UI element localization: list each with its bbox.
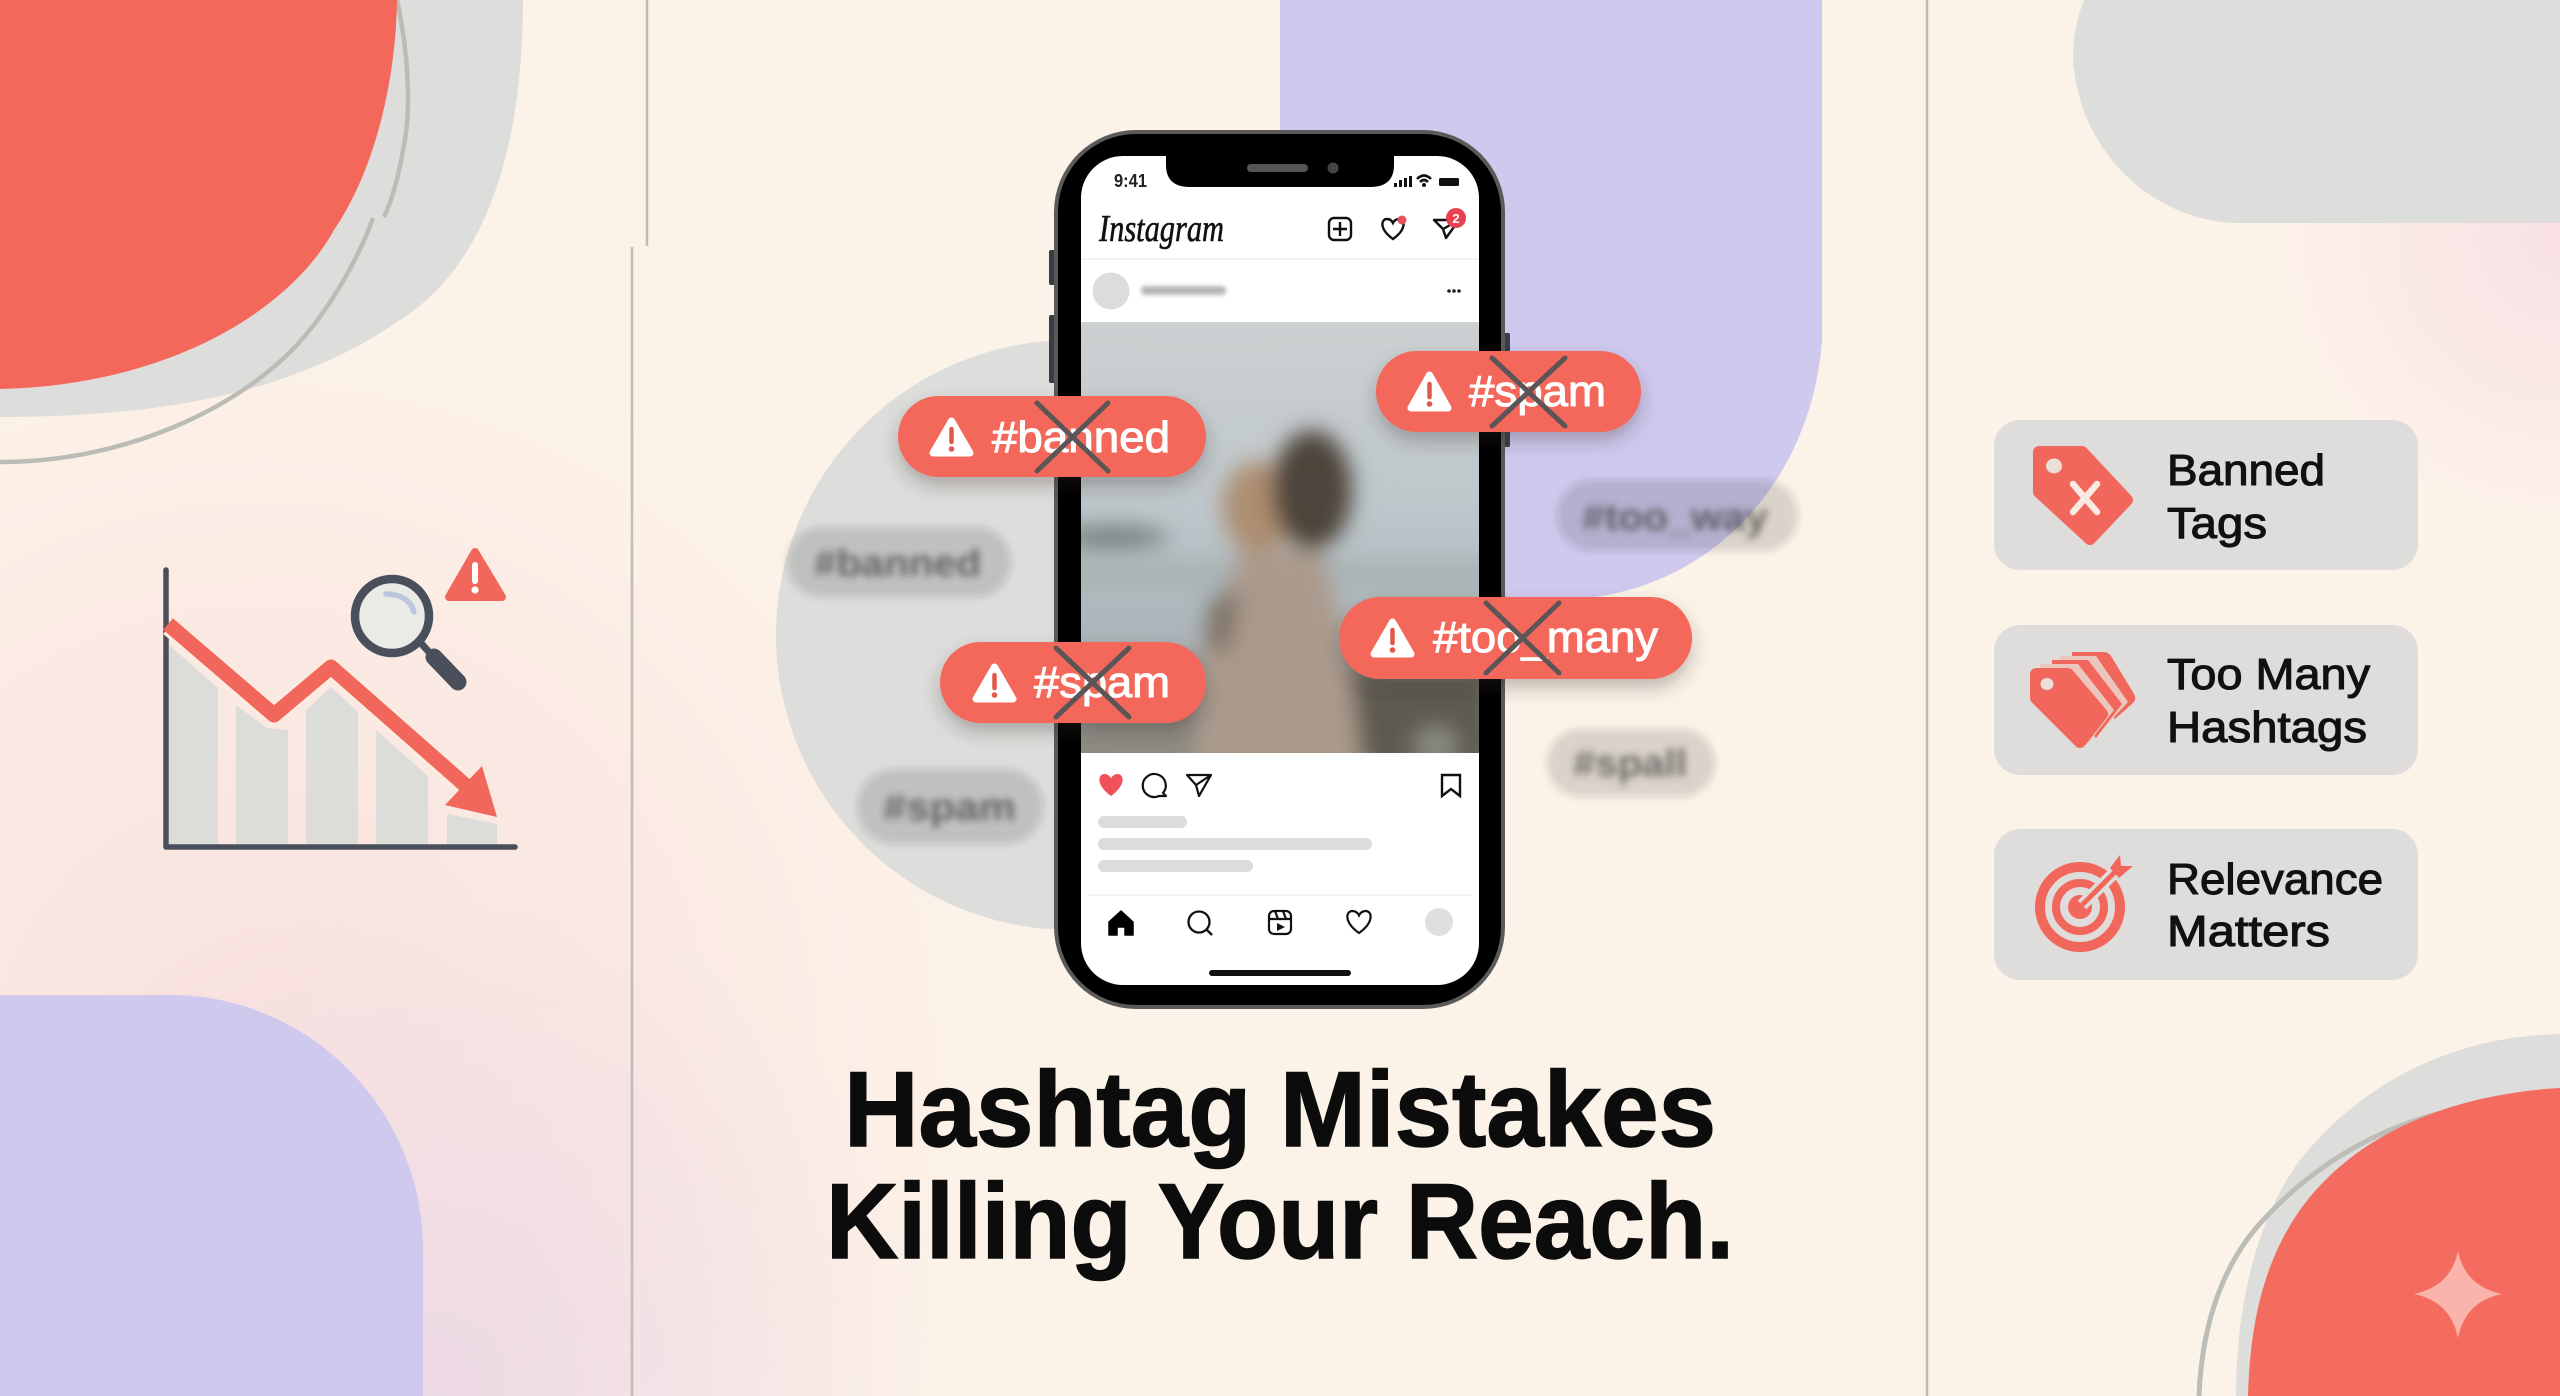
warning tag: #banned: #banned <box>992 413 1170 462</box>
icon: target and arrow <box>2040 855 2133 947</box>
icon: messages with badge: 2 <box>1452 211 1460 226</box>
icon: messages with badge <box>1434 208 1466 238</box>
blob: top-right grey <box>2073 0 2560 223</box>
blurred tag: #spall: #spall <box>1573 743 1687 785</box>
warning tag: #spam right: #spam <box>1469 367 1606 416</box>
blurred tag: #spam: #spam <box>883 787 1016 829</box>
card label: Too Many <box>2167 650 2370 699</box>
icon: add post <box>1329 218 1351 240</box>
home indicator <box>1209 970 1351 976</box>
chart axes <box>166 570 515 847</box>
phone mockup <box>1040 130 1520 1009</box>
blurred tag: #too_way <box>1557 480 1798 551</box>
phone screen <box>1081 156 1479 985</box>
warning tag: #banned <box>898 396 1206 477</box>
card: Relevance Matters: Matters <box>2167 907 2330 956</box>
blurred tag: #banned: #banned <box>814 543 981 585</box>
card: Too Many Hashtags <box>1994 625 2418 775</box>
status bar icons <box>1394 176 1459 187</box>
Instagram wordmark: Instagram <box>1098 208 1224 250</box>
blurred tag: #spall <box>1547 729 1715 797</box>
icon: banned tag <box>2039 452 2127 539</box>
title <box>826 1049 1734 1281</box>
title: Killing Your Reach. <box>826 1161 1734 1281</box>
blob: top-left grey, curve and coral <box>0 0 523 462</box>
warning tag: #too_many <box>1339 597 1692 679</box>
card: Too Many Hashtags: Hashtags <box>2167 703 2367 752</box>
bottom navigation <box>1109 908 1453 936</box>
warning tag: #spam right <box>1376 351 1641 432</box>
card: Relevance Matters <box>1994 829 2418 980</box>
phone side buttons <box>1049 250 1510 447</box>
notch <box>1166 150 1394 187</box>
status bar time: 9:41 <box>1114 171 1147 191</box>
warning tag: #spam left: #spam <box>1034 658 1170 707</box>
card: Banned Tags <box>1994 420 2418 570</box>
phone body <box>1054 130 1505 1009</box>
post actions <box>1099 774 1460 797</box>
backdrop: lavender panel behind phone <box>1280 0 1822 600</box>
post header <box>1092 272 1461 310</box>
declining trend arrow <box>168 624 497 817</box>
card: Banned Tags: Tags <box>2167 499 2267 548</box>
warning tag: #spam left <box>940 642 1206 723</box>
icon: warning triangle <box>449 552 502 597</box>
blob: bottom-right grey, curve, coral and sparkle <box>2199 1034 2560 1396</box>
warning tag: #too_many: #too_many <box>1433 613 1658 662</box>
blurred tag: #too_way: #too_way <box>1582 497 1768 539</box>
icon: stacked tags <box>2036 652 2135 744</box>
blurred tag: #spam <box>857 769 1043 844</box>
line chart: declining reach <box>166 552 515 847</box>
blurred post photo <box>1081 322 1479 753</box>
card label: Relevance <box>2167 855 2383 904</box>
blurred tag: #banned <box>787 527 1011 597</box>
title: Hashtag Mistakes <box>844 1049 1716 1169</box>
blob: bottom-left lavender <box>0 995 423 1396</box>
card label: Banned <box>2167 446 2325 495</box>
caption placeholder lines <box>1098 816 1372 872</box>
icon: magnifying glass <box>355 579 458 682</box>
chart bars <box>169 645 497 845</box>
backdrop: grey circle behind phone <box>776 340 1366 930</box>
icon: notifications heart <box>1382 216 1406 239</box>
